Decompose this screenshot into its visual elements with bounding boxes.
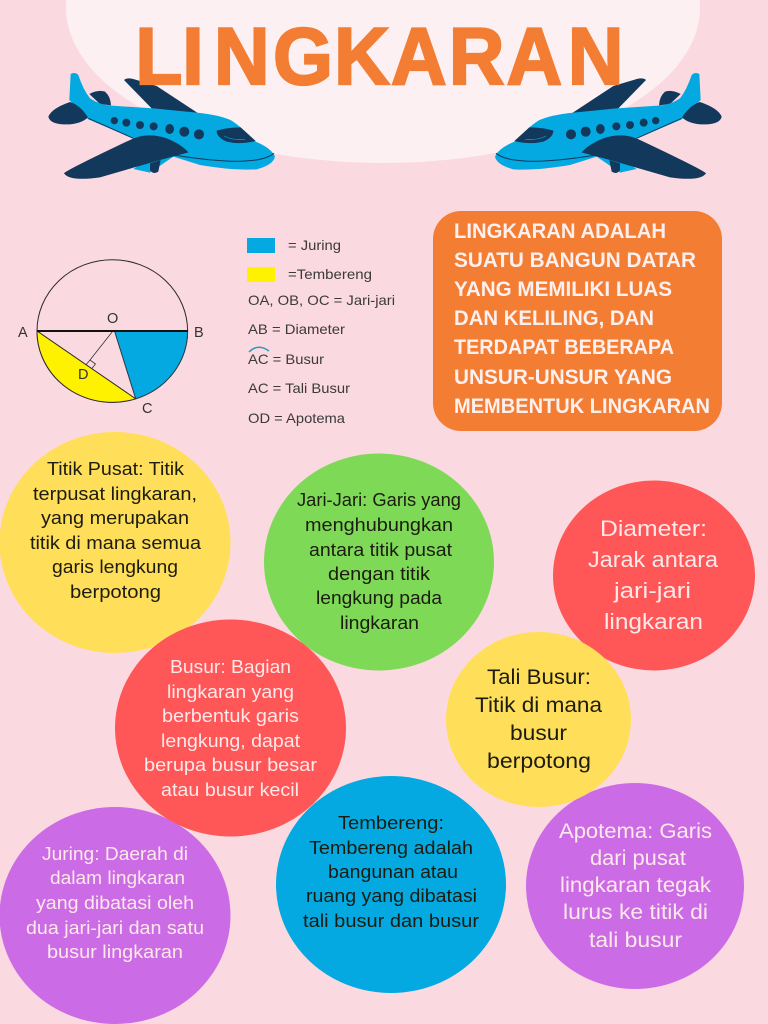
definition text: MEMBENTUK LINGKARAN <box>454 394 710 418</box>
bubble: titik pusat: garis lengkung <box>52 556 178 577</box>
bubble: tali busur: Tali Busur: <box>487 666 591 689</box>
legend text: AC = Tali Busur <box>248 380 350 396</box>
juring sector <box>114 331 188 399</box>
header ellipse <box>66 0 700 163</box>
bubble: jari-jari: antara titik pusat <box>309 539 452 560</box>
bubble: titik pusat: titik di mana semua <box>30 532 202 553</box>
bubble: tembereng: bangunan atau <box>328 861 458 882</box>
bubble: jari-jari: menghubungkan <box>305 514 453 535</box>
point labels: O <box>107 311 118 327</box>
bubble: busur: lengkung, dapat <box>161 730 300 751</box>
definition text: TERDAPAT BEBERAPA <box>454 335 674 359</box>
bubble: busur: berbentuk garis <box>162 705 299 726</box>
bubble: busur: lingkaran yang <box>167 681 294 702</box>
bubble: jari-jari: lengkung pada <box>316 587 443 608</box>
diameter line <box>37 330 188 332</box>
bubble: jari-jari <box>264 454 494 670</box>
bubble: jari-jari: Jari-Jari: Garis yang <box>297 489 461 510</box>
bubble: juring: dalam lingkaran <box>50 867 185 888</box>
definition text: DAN KELILING, DAN <box>454 306 654 330</box>
apotema line <box>86 332 112 369</box>
bubble: tali busur: busur <box>510 722 567 745</box>
bubble: tembereng: ruang yang dibatasi <box>306 885 477 906</box>
bubble: titik pusat: terpusat lingkaran, <box>33 483 197 504</box>
bubble: tali busur: Titik di mana <box>475 694 602 717</box>
legend swatch: juring <box>247 238 275 253</box>
legend text: AC = Busur <box>248 351 324 367</box>
definition text: UNSUR-UNSUR YANG <box>454 365 672 389</box>
point labels: C <box>142 401 152 417</box>
legend text: OD = Apotema <box>248 410 345 426</box>
circle diagram <box>18 260 204 417</box>
bubble: apotema: tali busur <box>589 929 682 952</box>
definition text <box>454 219 710 418</box>
bubble: apotema: Apotema: Garis <box>559 820 712 843</box>
bubble: titik pusat: Titik Pusat: Titik <box>47 458 185 479</box>
title: LINGKARAN <box>135 10 623 101</box>
bubble: busur: atau busur kecil <box>161 779 299 800</box>
bubble: busur: berupa busur besar <box>144 754 317 775</box>
bubble: tembereng <box>276 776 506 993</box>
legend text: = Juring <box>288 237 341 253</box>
point labels: B <box>194 325 204 341</box>
definition text: LINGKARAN ADALAH <box>454 219 666 243</box>
bubble: busur <box>115 620 346 836</box>
bubble: tali busur <box>446 632 631 807</box>
legend swatch: tembereng <box>247 267 275 282</box>
definition text: SUATU BANGUN DATAR <box>454 248 696 272</box>
bubble: jari-jari: lingkaran <box>340 612 419 633</box>
bubble: tembereng: tali busur dan busur <box>303 910 479 931</box>
bubble: juring: dua jari-jari dan satu <box>26 917 204 938</box>
circle outline <box>37 260 188 402</box>
point labels <box>18 311 204 417</box>
bubble: diameter <box>553 480 755 670</box>
bubble: apotema: lingkaran tegak <box>560 874 712 897</box>
arc mark above AC <box>249 347 269 352</box>
icon: right airplane <box>495 73 722 179</box>
bubble: juring: yang dibatasi oleh <box>36 892 194 913</box>
definition text: YANG MEMILIKI LUAS <box>454 277 672 301</box>
legend <box>247 237 395 426</box>
bubble: juring: Juring: Daerah di <box>42 843 188 864</box>
bubble: tembereng: Tembereng: <box>338 812 444 833</box>
point labels: D <box>78 367 88 383</box>
bubble: juring: busur lingkaran <box>47 941 183 962</box>
bubble: diameter: jari-jari <box>613 578 691 603</box>
bubble: apotema: dari pusat <box>590 847 686 870</box>
bubble: jari-jari: dengan titik <box>328 563 431 584</box>
bubble: apotema <box>526 783 744 989</box>
tembereng segment <box>37 331 136 402</box>
bubble: titik pusat: yang merupakan <box>41 507 189 528</box>
bubble: diameter: Diameter: <box>600 516 707 541</box>
bubble: titik pusat: berpotong <box>70 581 161 602</box>
legend text: AB = Diameter <box>248 321 345 337</box>
legend text <box>248 237 395 426</box>
bubble: titik pusat <box>0 432 230 653</box>
definition box <box>433 211 722 431</box>
bubble: busur: Busur: Bagian <box>170 656 291 677</box>
bubble: tembereng: Tembereng adalah <box>309 837 473 858</box>
icon: left airplane <box>48 73 275 179</box>
bubble: diameter: Jarak antara <box>588 547 718 572</box>
legend text: OA, OB, OC = Jari-jari <box>248 292 395 308</box>
point labels: A <box>18 325 28 341</box>
box background <box>433 211 722 431</box>
bubble: diameter: lingkaran <box>604 609 703 634</box>
bubble: juring <box>0 807 230 1024</box>
bubble: apotema: lurus ke titik di <box>563 901 708 924</box>
bubble: tali busur: berpotong <box>487 750 591 773</box>
legend text: =Tembereng <box>288 266 372 282</box>
